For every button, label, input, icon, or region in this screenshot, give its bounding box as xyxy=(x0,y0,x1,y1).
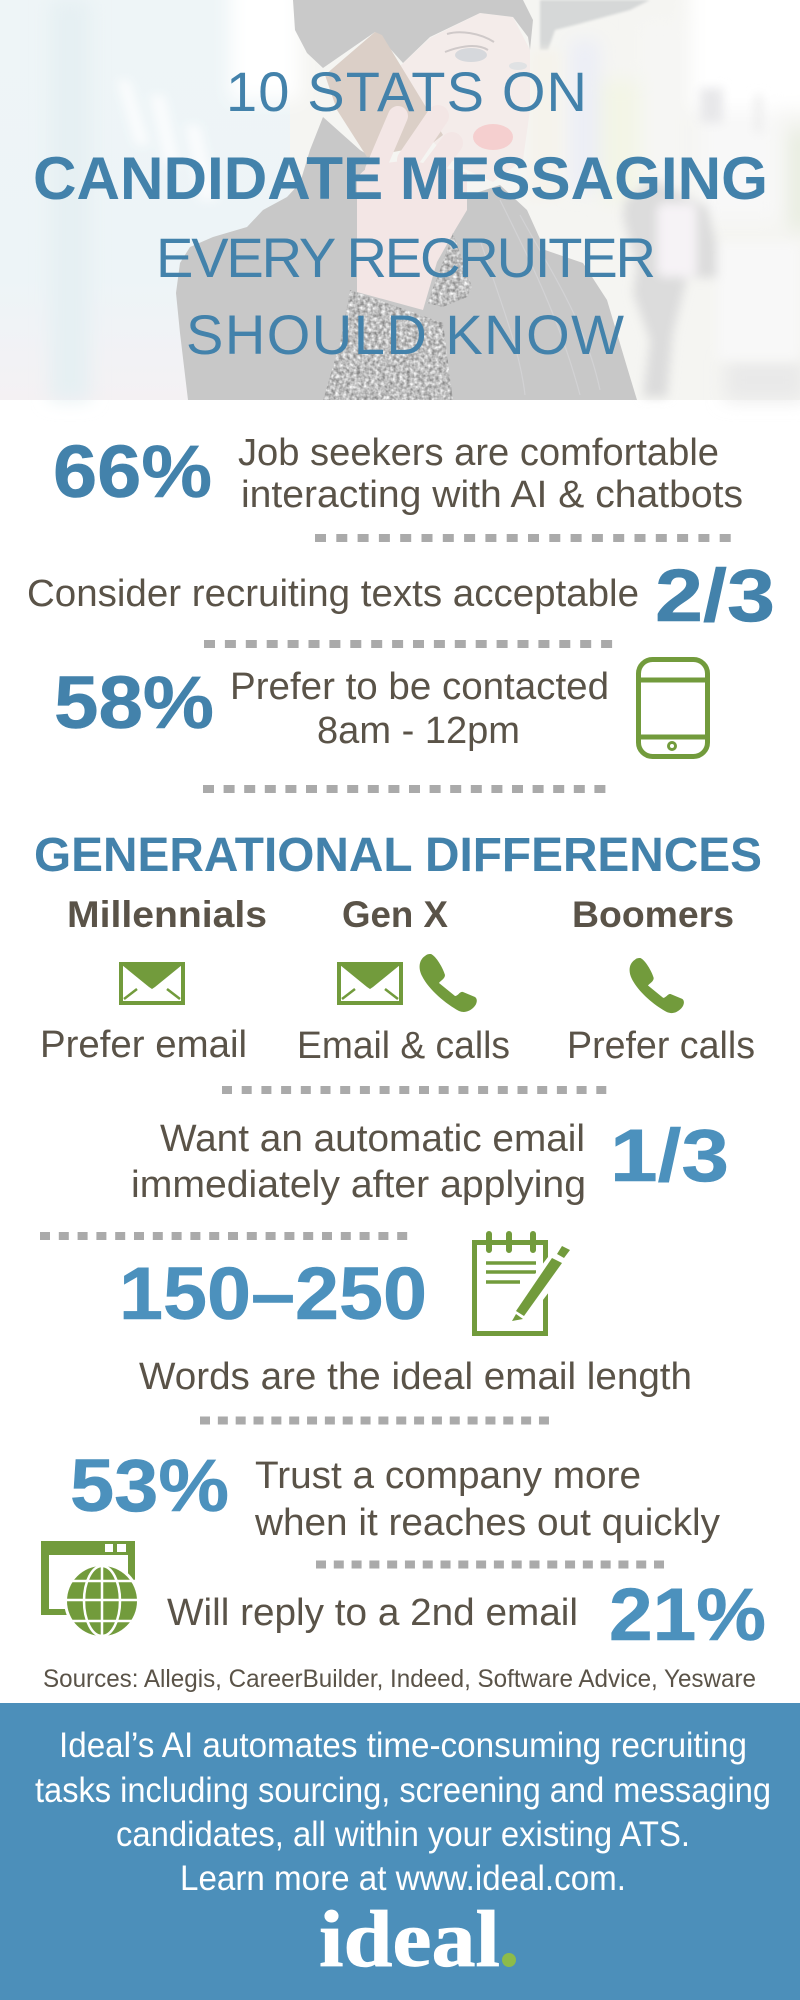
stat: 66% comfortable with AI: 66% xyxy=(53,430,212,513)
stat: 1/3 automatic email: Want an automatic email xyxy=(160,1118,585,1160)
footer text: Learn more at www.ideal.com. xyxy=(180,1859,626,1898)
hair strands xyxy=(480,200,600,395)
stat: 2/3 recruiting texts: Consider recruiting texts acceptable xyxy=(27,573,639,615)
column: gen x: Email & calls xyxy=(297,1025,510,1067)
icon: smartphone xyxy=(638,660,708,756)
sweater cuff xyxy=(323,290,453,400)
stat: 150-250 words: Words are the ideal email length xyxy=(139,1356,692,1398)
stat: 53% trust xyxy=(70,1444,720,1544)
title: EVERY RECRUITER xyxy=(156,226,656,289)
phone xyxy=(325,32,443,157)
jacket xyxy=(176,117,637,400)
stat: 21% second email: 21% xyxy=(609,1573,766,1656)
background awning xyxy=(540,0,650,50)
column: boomers xyxy=(567,894,755,1067)
icon: envelope xyxy=(337,962,403,1005)
column: boomers: Boomers xyxy=(572,894,734,935)
stat: 58% contact time: Prefer to be contacted xyxy=(230,666,609,708)
stat: 53% trust: Trust a company more xyxy=(255,1455,641,1497)
face xyxy=(400,13,530,182)
sweater collar xyxy=(427,233,472,307)
column: millennials: Millennials xyxy=(67,894,267,935)
stat: 150-250 words xyxy=(119,1252,692,1398)
stat: 66% comfortable with AI: Job seekers are comfortable xyxy=(238,432,719,474)
sources: Sources: Allegis, CareerBuilder, Indeed, Software Advice, Yesware xyxy=(43,1665,756,1693)
stat: 58% contact time: 58% xyxy=(54,661,214,744)
stat: 1/3 automatic email xyxy=(131,1114,729,1206)
header photo background xyxy=(0,0,800,400)
blurred pedestrian xyxy=(623,88,800,397)
stat: 2/3 recruiting texts xyxy=(27,554,775,637)
column: boomers: Prefer calls xyxy=(567,1025,755,1067)
title: 10 STATS ON xyxy=(226,60,587,123)
stat: 21% second email: Will reply to a 2nd email xyxy=(167,1592,578,1634)
stat: 66% comfortable with AI xyxy=(53,430,743,516)
column: gen x: Gen X xyxy=(342,894,448,935)
title: SHOULD KNOW xyxy=(186,303,624,366)
heading: generational differences: GENERATIONAL DIFFERENCES xyxy=(34,829,762,882)
stat: 53% trust: 53% xyxy=(70,1444,229,1527)
lips xyxy=(473,124,513,150)
stat: 53% trust: when it reaches out quickly xyxy=(254,1502,720,1544)
eye and brow xyxy=(455,48,487,62)
hat xyxy=(293,0,533,68)
icon: browser window and globe xyxy=(41,1541,140,1639)
footer text xyxy=(35,1726,771,1898)
icon: telephone handset xyxy=(420,954,477,1012)
stat: 58% contact time xyxy=(54,661,609,752)
stat: 21% second email xyxy=(167,1573,766,1656)
footer text: candidates, all within your existing ATS. xyxy=(116,1815,690,1854)
footer text: Ideal’s AI automates time-consuming recruiting xyxy=(59,1726,747,1765)
column: millennials xyxy=(40,894,267,1066)
stat: 150-250 words: 150–250 xyxy=(119,1252,427,1335)
stat: 1/3 automatic email: 1/3 xyxy=(610,1114,729,1197)
title: CANDIDATE MESSAGING xyxy=(33,145,768,212)
blurred street signage xyxy=(117,80,217,200)
column: gen x xyxy=(297,894,510,1067)
stat: 2/3 recruiting texts: 2/3 xyxy=(655,554,775,637)
icon: envelope xyxy=(119,962,185,1005)
hand xyxy=(357,116,467,310)
background behind face xyxy=(530,50,560,200)
stat: 58% contact time: 8am - 12pm xyxy=(317,710,520,752)
footer panel xyxy=(0,1703,800,2000)
title xyxy=(33,60,768,366)
logo: ideal: ideal xyxy=(319,1896,500,1984)
stat: 66% comfortable with AI: interacting with AI & chatbots xyxy=(241,474,743,516)
stat: 1/3 automatic email: immediately after applying xyxy=(131,1164,586,1206)
icon: telephone handset xyxy=(630,958,684,1013)
column: millennials: Prefer email xyxy=(40,1024,247,1066)
icon: notepad and pencil xyxy=(474,1234,570,1334)
